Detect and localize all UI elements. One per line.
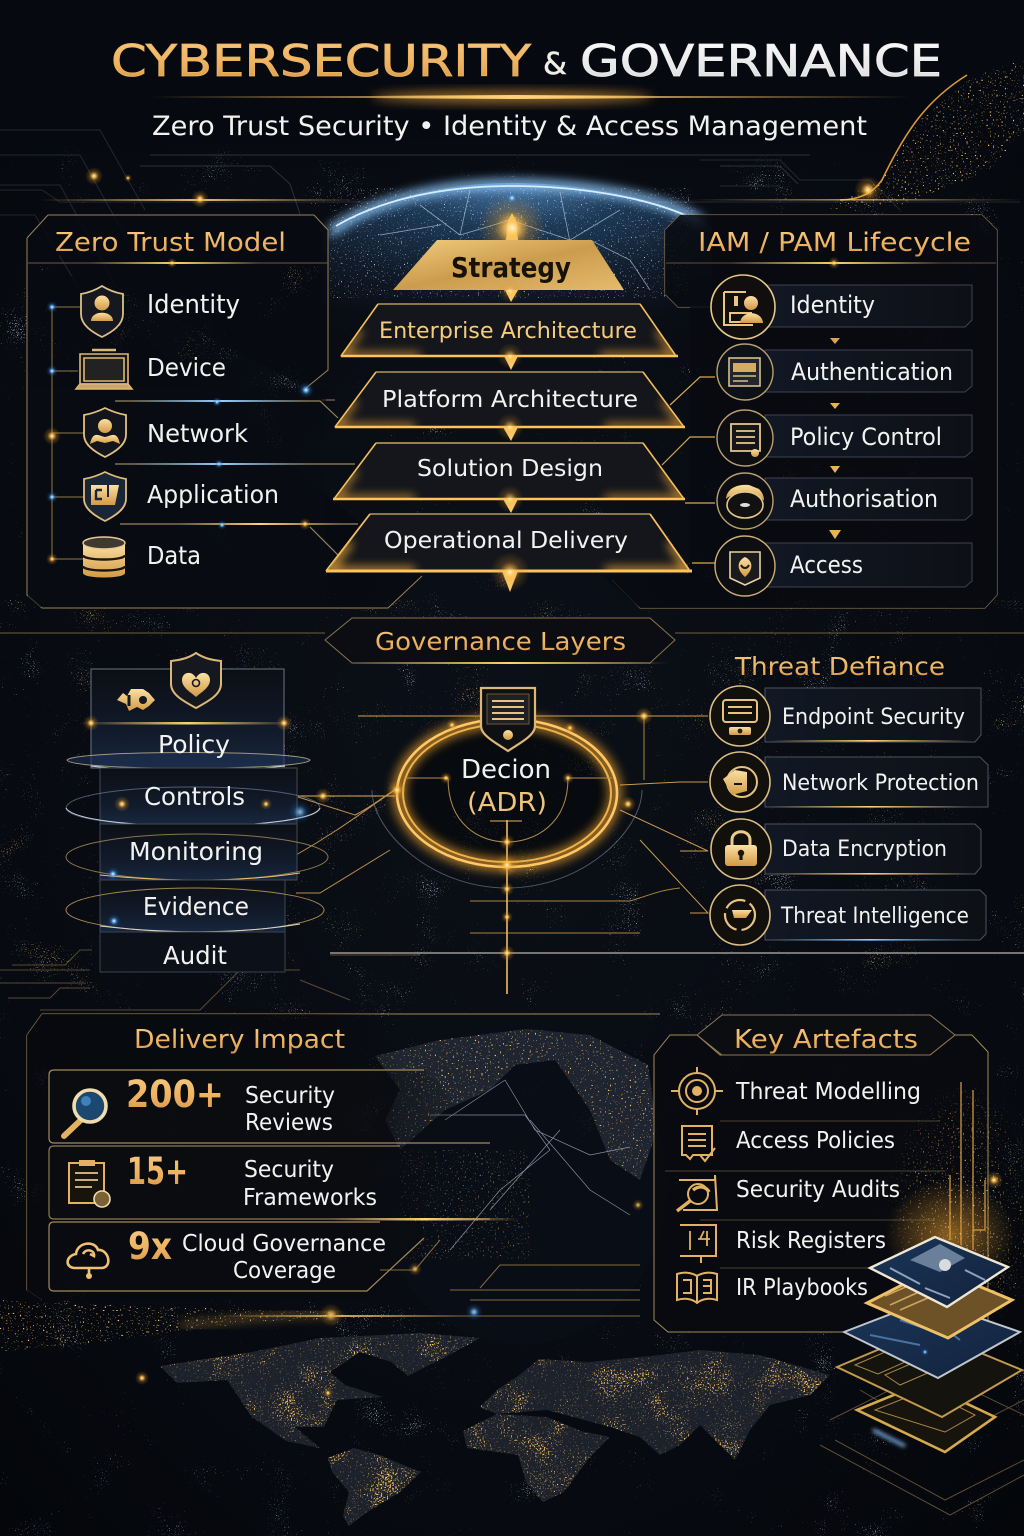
step arrow	[830, 338, 840, 344]
top dust swoosh	[827, 60, 1024, 209]
layer: controls	[66, 768, 320, 826]
artefact: ir playbooks: IR Playbooks	[736, 1275, 868, 1301]
stat: cloud governance: Coverage	[233, 1258, 336, 1284]
tier: operational delivery: Operational Delivery	[384, 528, 628, 554]
icon: network protection	[710, 752, 770, 812]
tier: enterprise architecture: Enterprise Architecture	[379, 319, 637, 344]
item: network	[84, 408, 248, 457]
threat defiance list	[710, 686, 988, 945]
panel heading	[697, 1015, 955, 1055]
tier: solution design: Solution Design	[417, 456, 603, 482]
stat: security frameworks: 15+	[127, 1150, 188, 1193]
heading: threat defiance: Threat Defiance	[734, 652, 945, 681]
icon: audit magnifier	[677, 1175, 717, 1211]
icon: threat intelligence	[710, 885, 770, 945]
icon: target	[671, 1067, 723, 1115]
icon: authorisation ring	[717, 473, 773, 529]
icon: network shield	[84, 408, 126, 457]
step arrow	[830, 403, 840, 409]
icon: identity shield	[81, 286, 123, 337]
layer: evidence: Evidence	[143, 892, 249, 921]
tier: solution design	[333, 443, 685, 499]
layer: monitoring	[66, 824, 328, 881]
item: endpoint security	[710, 686, 981, 746]
center label: (ADR)	[467, 788, 547, 818]
panel: iam pam lifecycle	[600, 215, 997, 608]
icon: padlock	[711, 819, 771, 879]
artefact: ir playbooks	[677, 1273, 868, 1303]
subtitle: Zero Trust Security • Identity & Access Management	[152, 111, 867, 142]
item: threat intelligence: Threat Intelligence	[780, 904, 969, 929]
wireframe underlay	[820, 1370, 1024, 1515]
icon: policy document	[717, 410, 773, 466]
layer: controls: Controls	[144, 782, 245, 811]
item: data encryption: Data Encryption	[782, 837, 947, 862]
layer 3: blue	[844, 1300, 1020, 1378]
step: authentication	[717, 344, 972, 400]
globe map backdrop	[375, 1028, 656, 1338]
governance stack	[66, 653, 328, 972]
heading: governance layers	[325, 618, 675, 664]
layer 5: gold outline	[857, 1383, 995, 1452]
panel: zero trust model	[27, 215, 422, 608]
layer: audit	[100, 932, 285, 972]
layer 4: dark gold	[837, 1330, 1022, 1417]
item: device	[76, 350, 226, 389]
step arrow	[830, 466, 840, 473]
icon: open book	[677, 1273, 717, 1303]
panel frame	[612, 215, 997, 608]
panel frame	[654, 1035, 988, 1332]
icon: database	[83, 537, 125, 578]
earth horizon behind pyramid	[322, 183, 712, 327]
item: endpoint security: Endpoint Security	[782, 705, 965, 730]
step: access: Access	[790, 551, 863, 579]
connector node	[503, 427, 518, 441]
panel heading: Delivery Impact	[134, 1025, 345, 1055]
tier: strategy	[393, 240, 624, 290]
heading divider	[28, 258, 328, 268]
rising light lines	[885, 1082, 1015, 1290]
artefact layered stack	[820, 1080, 1024, 1515]
step: authentication: Authentication	[791, 358, 953, 386]
artefact: threat modelling: Threat Modelling	[735, 1079, 921, 1105]
artefact: threat modelling	[671, 1067, 921, 1115]
layer: audit: Audit	[163, 941, 227, 970]
item: application	[84, 472, 279, 521]
icon: laptop	[76, 350, 132, 389]
icon: register	[680, 1225, 716, 1263]
stat: security reviews: Security	[245, 1083, 335, 1109]
tier: operational delivery	[326, 514, 692, 571]
layer: policy	[67, 653, 310, 771]
icon: clipboard	[69, 1160, 110, 1207]
layer 1: blue document	[870, 1237, 1008, 1307]
step: identity: Identity	[790, 291, 875, 319]
icon: identity badge	[711, 275, 775, 339]
item: network protection	[710, 752, 988, 812]
circuit lines lower middle	[220, 1199, 644, 1327]
icon: authentication window	[717, 344, 773, 400]
icon: document check	[682, 1126, 715, 1161]
icon: application shield	[84, 472, 126, 521]
icon: heart shield	[171, 653, 221, 708]
dust over stack	[886, 1084, 1024, 1322]
layer: evidence	[66, 880, 324, 932]
icon: magnifier	[64, 1090, 106, 1136]
tier: platform architecture: Platform Architecture	[382, 387, 638, 413]
step: policy control	[717, 410, 972, 466]
connector node	[503, 499, 518, 513]
artefact: access policies	[682, 1126, 895, 1161]
heading: governance layers: Governance Layers	[375, 627, 626, 656]
item: network protection: Network Protection	[782, 771, 979, 796]
step: authorisation: Authorisation	[790, 485, 938, 513]
pyramid	[326, 240, 692, 592]
center label	[461, 755, 551, 818]
panel: delivery impact	[27, 1014, 660, 1300]
stat: cloud governance: 9x	[128, 1225, 172, 1268]
section rails	[0, 633, 1024, 970]
artefact: risk registers: Risk Registers	[736, 1228, 886, 1254]
item: threat intelligence	[710, 885, 986, 945]
step: access	[715, 536, 972, 596]
stat: cloud governance	[49, 1222, 424, 1291]
layer 2: gold	[867, 1268, 1012, 1338]
connector rail	[43, 301, 84, 565]
header glow rail	[40, 167, 1024, 208]
stat: security frameworks	[49, 1146, 520, 1220]
pyramid connectors	[115, 377, 715, 563]
connector node	[502, 571, 518, 592]
item: identity	[81, 286, 240, 337]
artefact: risk registers	[680, 1225, 886, 1263]
world map	[135, 1330, 850, 1536]
title: governance: GOVERNANCE	[580, 36, 942, 87]
stat: security frameworks: Security	[244, 1157, 334, 1183]
stat: security reviews: Reviews	[245, 1110, 333, 1136]
item: device: Device	[147, 353, 226, 382]
item: data encryption	[711, 819, 981, 879]
step: authorisation	[717, 473, 972, 529]
connector node	[504, 356, 518, 370]
panel heading: Zero Trust Model	[55, 228, 286, 258]
icon: cloud	[68, 1244, 108, 1279]
panel frame	[27, 1014, 660, 1300]
item: network: Network	[147, 419, 248, 448]
decision ring	[330, 688, 1024, 994]
layer: policy: Policy	[158, 730, 230, 759]
title	[111, 36, 942, 87]
title: cybersecurity: CYBERSECURITY	[111, 36, 531, 87]
icon: gear glyph	[117, 689, 155, 711]
step arrow	[829, 530, 841, 539]
stat: security reviews: 200+	[126, 1073, 224, 1116]
connector node	[505, 290, 518, 302]
artefact: access policies: Access Policies	[736, 1128, 895, 1154]
artefact: security audits: Security Audits	[736, 1177, 900, 1203]
tier: platform architecture	[335, 372, 685, 427]
panel: key artefacts	[654, 1015, 988, 1332]
tier: strategy: Strategy	[451, 251, 571, 284]
step: policy control: Policy Control	[790, 423, 942, 451]
center label: Decion	[461, 755, 551, 785]
item: application: Application	[147, 480, 279, 509]
layer: monitoring: Monitoring	[129, 837, 263, 866]
stat: security frameworks: Frameworks	[243, 1185, 377, 1211]
item: identity: Identity	[147, 290, 240, 320]
stat: cloud governance: Cloud Governance	[182, 1231, 386, 1257]
icon: access shield	[715, 536, 775, 596]
gold dust band	[0, 1300, 354, 1351]
stat: security reviews	[49, 1070, 490, 1143]
step: identity	[711, 275, 972, 339]
panel heading: IAM / PAM Lifecycle	[698, 228, 971, 258]
icon: endpoint	[710, 686, 770, 746]
icon: policy shield	[481, 688, 535, 751]
panel heading: Key Artefacts	[734, 1025, 918, 1055]
artefact: security audits	[677, 1175, 900, 1211]
panel frame	[27, 215, 422, 608]
title: ampersand: &	[543, 47, 567, 82]
tier: enterprise architecture	[341, 304, 678, 356]
item: data: Data	[147, 541, 201, 570]
item: data	[83, 537, 201, 578]
heading divider	[666, 257, 996, 269]
title underline	[150, 90, 910, 104]
